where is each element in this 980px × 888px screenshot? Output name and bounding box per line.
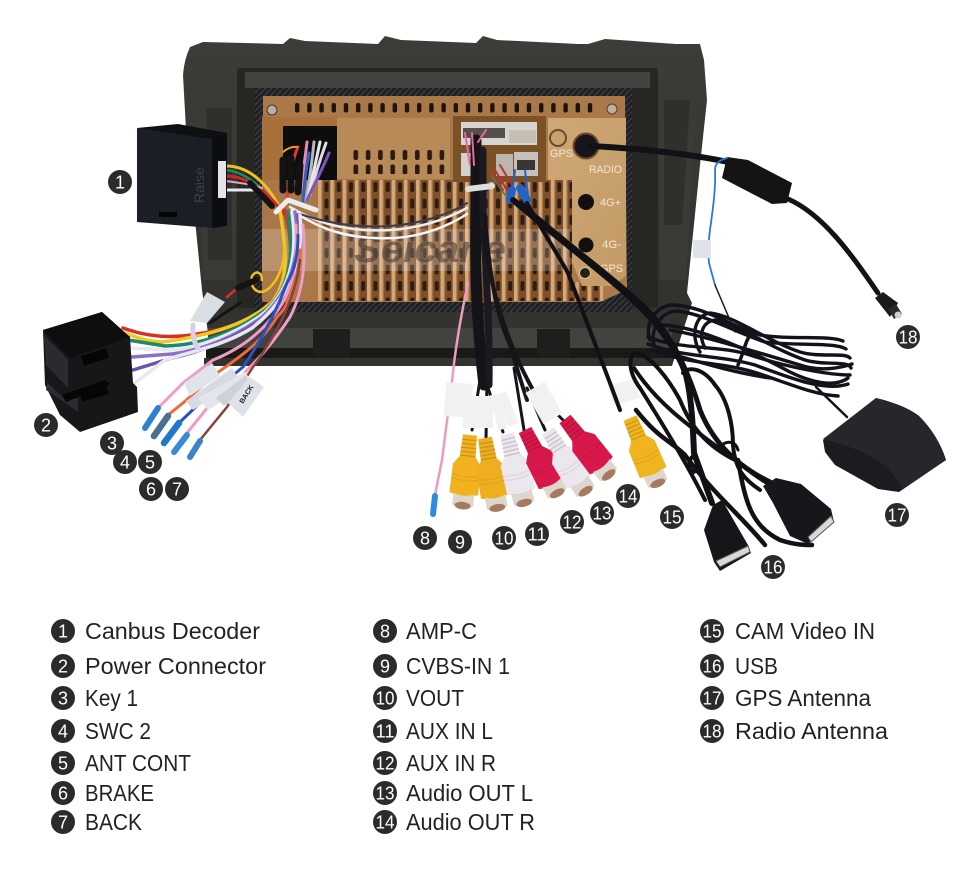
legend item 10: 10 [376, 688, 394, 708]
box side [212, 133, 227, 228]
badge 18 [896, 325, 920, 349]
badge 4: 4 [120, 452, 130, 472]
badge 8: 8 [420, 528, 430, 548]
badge 15 [660, 505, 684, 529]
legend item 4: 4 [58, 722, 68, 742]
inner frame recess [237, 68, 658, 308]
antenna plug [875, 292, 902, 319]
harness tag [190, 292, 225, 323]
right mount tab [537, 329, 570, 358]
black lead [715, 285, 735, 332]
wire tag [693, 240, 711, 258]
rca 5 white [536, 423, 600, 502]
badge 9: 9 [455, 532, 465, 552]
panel print: 4G- [602, 239, 621, 251]
rca tags [444, 379, 640, 430]
legend item 17: GPS Antenna [735, 685, 871, 711]
watermark band [262, 229, 570, 271]
badge 5 [138, 450, 162, 474]
rca 6 red [554, 410, 622, 487]
gps antenna puck [823, 398, 946, 492]
panel: plastic housing [183, 36, 707, 366]
head unit rear panel [183, 36, 707, 366]
right plate [548, 118, 626, 286]
badge 5: 5 [145, 452, 155, 472]
badge 2 [34, 413, 58, 437]
panel print: GPS [550, 148, 573, 160]
power connector [43, 312, 138, 432]
badge 16: 16 [764, 558, 782, 578]
legend item 6: 6 [58, 784, 68, 804]
legend item 10: VOUT [406, 685, 464, 711]
legend item 17: 17 [702, 688, 722, 708]
legend item 6: BRAKE [85, 780, 154, 806]
radio socket [574, 134, 598, 158]
badge 6 [139, 477, 163, 501]
wire tips [145, 408, 200, 457]
badge 17 [885, 503, 909, 527]
lower band [208, 312, 670, 328]
legend item 4 [51, 718, 151, 744]
badge 14 [616, 484, 640, 508]
fins lower right [572, 282, 604, 301]
legend item 11: 11 [376, 722, 394, 742]
badge 9 [448, 530, 472, 554]
rca connectors [448, 410, 673, 514]
badge 1: 1 [115, 172, 125, 192]
badge 4 [113, 450, 137, 474]
legend item 10 [373, 685, 464, 711]
legend item 7: 7 [58, 812, 68, 832]
legend item 3: Key 1 [85, 685, 138, 711]
rca 7 yellow [617, 412, 673, 493]
carbon border [255, 88, 632, 312]
middle plate [337, 118, 450, 179]
legend item 14: Audio OUT R [406, 809, 535, 835]
legend item 9: 9 [380, 656, 390, 676]
badge 3 [100, 431, 124, 455]
legend item 5: 5 [58, 754, 68, 774]
raise text: Raise [191, 167, 207, 203]
legend item 12: 12 [376, 754, 394, 774]
legend item 1: Canbus Decoder [85, 618, 260, 644]
top vent slots [295, 103, 595, 113]
screw right [607, 104, 617, 114]
harness tie [193, 325, 198, 348]
bundle tie [468, 186, 492, 189]
badge 2: 2 [41, 416, 51, 436]
legend item 12 [373, 750, 496, 776]
badge 17: 17 [888, 506, 906, 526]
left plate [262, 117, 337, 183]
fins over right [550, 180, 572, 301]
badge 12 [560, 510, 584, 534]
gold chassis [263, 96, 627, 302]
fins [262, 180, 550, 301]
legend item 13: 13 [376, 784, 394, 804]
legend item 16 [700, 653, 778, 679]
left mount tab [313, 329, 350, 358]
legend item 7: BACK [85, 809, 143, 835]
amp tip [433, 496, 435, 514]
legend item 1: 1 [58, 622, 68, 642]
gps antenna coil [648, 305, 852, 417]
badge 11: 11 [528, 524, 546, 544]
badge 7 [165, 477, 189, 501]
legend item 18: Radio Antenna [735, 718, 888, 744]
badge 12: 12 [562, 512, 582, 532]
rca 3 white [493, 430, 539, 510]
canbus harness wires [123, 142, 467, 440]
panel print: 4G+ [600, 197, 621, 209]
badge 10 [492, 526, 516, 550]
legend item 11: AUX IN L [406, 718, 493, 744]
badge 3: 3 [107, 434, 117, 454]
inline box [722, 157, 792, 204]
legend item 15: CAM Video IN [735, 618, 875, 644]
legend [51, 618, 888, 835]
4G minus hole [578, 238, 594, 252]
screw [267, 105, 277, 115]
badge 8 [413, 526, 437, 550]
radio antenna cable [590, 146, 902, 332]
badge 10: 10 [494, 528, 514, 548]
tip labels [184, 363, 264, 417]
badge 13: 13 [592, 504, 612, 524]
badge 13 [590, 501, 614, 525]
canbus decoder box [137, 124, 227, 228]
main black cable bundle [435, 130, 563, 495]
legend item 13: Audio OUT L [406, 780, 533, 806]
box front [137, 128, 212, 228]
legend item 3: 3 [58, 688, 68, 708]
legend item 6 [51, 780, 154, 806]
badge 6: 6 [146, 480, 156, 500]
badge 7: 7 [172, 480, 182, 500]
legend item 14: 14 [376, 812, 394, 832]
legend item 8: AMP-C [406, 618, 477, 644]
badge 18: 18 [898, 328, 918, 348]
legend item 5: ANT CONT [85, 750, 191, 776]
legend item 16: USB [735, 653, 778, 679]
box top [137, 124, 227, 139]
connector socket [283, 126, 337, 180]
usb plug b [763, 478, 834, 544]
badge 1 [108, 170, 132, 194]
legend item 9: CVBS-IN 1 [406, 653, 510, 679]
callout numbers [34, 170, 920, 579]
white plug [218, 161, 226, 198]
badge 11 [525, 522, 549, 546]
legend item 11 [373, 718, 493, 744]
white connectors [461, 122, 538, 176]
legend item 18: 18 [702, 722, 722, 742]
middle plate holes [353, 150, 445, 174]
GPS jack [550, 130, 566, 146]
camera and usb cables [513, 200, 812, 545]
legend item 2: 2 [58, 656, 68, 676]
legend item 2: Power Connector [85, 653, 266, 679]
usb plug a [704, 500, 751, 571]
right connector block [453, 116, 546, 182]
rca 4 red [512, 423, 572, 503]
legend item 15: 15 [702, 622, 722, 642]
legend item 7 [51, 809, 143, 835]
badge 15: 15 [662, 508, 682, 528]
cable tie [276, 200, 316, 212]
blue wire [708, 158, 727, 285]
GPS small socket [580, 268, 590, 278]
legend item 16: 16 [702, 656, 722, 676]
badge 14: 14 [618, 486, 638, 506]
legend item 12: AUX IN R [406, 750, 496, 776]
legend item 8 [373, 618, 477, 644]
panel print: RADIO [589, 164, 622, 176]
legend item 3 [51, 685, 138, 711]
watermark band: Seicane [354, 229, 506, 271]
legend item 8: 8 [380, 622, 390, 642]
panel print [550, 148, 623, 275]
legend item 4: SWC 2 [85, 718, 151, 744]
rca 2 yellow [471, 435, 512, 514]
blue caps [510, 188, 527, 200]
panel print: GPS [600, 263, 623, 275]
4G plus hole [578, 194, 594, 210]
box vent [159, 212, 177, 217]
BACK tag: BACK [239, 384, 255, 405]
badge 16 [761, 555, 785, 579]
rca 1 yellow [448, 433, 484, 511]
